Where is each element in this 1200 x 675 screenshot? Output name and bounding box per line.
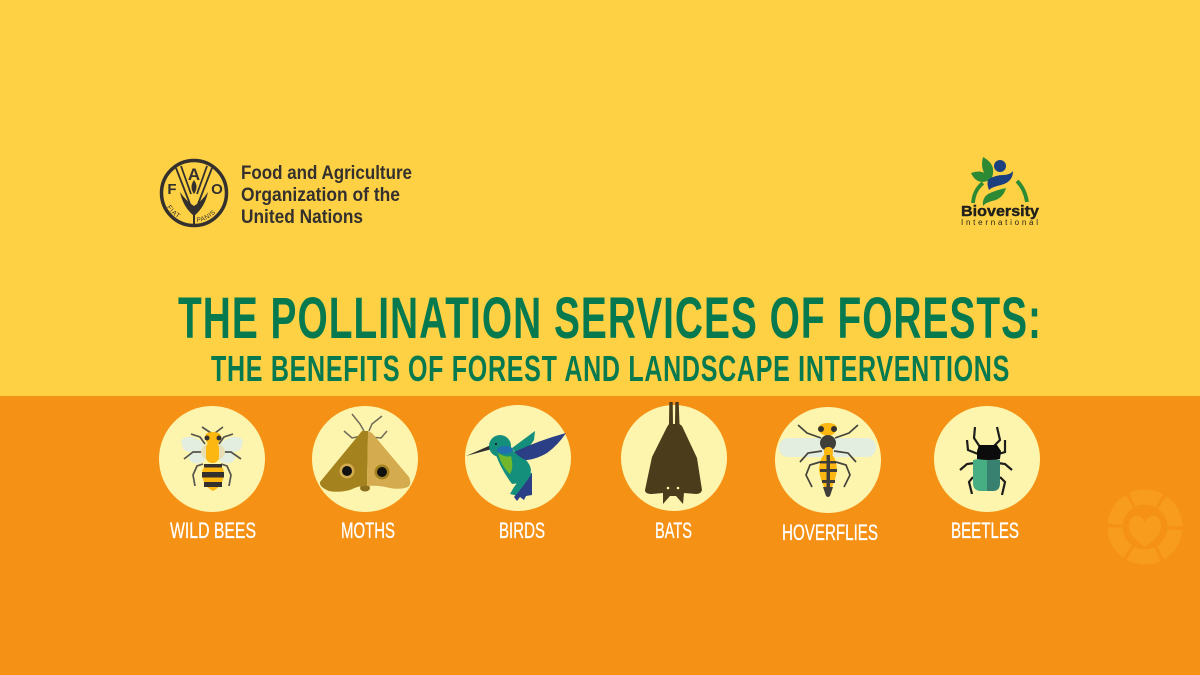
text: FAO name: Organization of the xyxy=(241,185,400,206)
item: bats xyxy=(621,402,727,543)
item: birds xyxy=(465,405,571,543)
icon: beetle xyxy=(934,406,1040,512)
panel: orange lower background xyxy=(0,396,1200,675)
icon: watermark heart cycle xyxy=(1105,487,1185,567)
icon: moth xyxy=(312,406,418,512)
text: Bioversity name: International xyxy=(961,218,1038,227)
logo: FAO xyxy=(160,158,412,228)
label: moths: MOTHS xyxy=(341,518,395,543)
icon: FAO emblem: FIAT xyxy=(167,204,180,218)
text: Bioversity name: Bioversity xyxy=(961,204,1039,220)
label: birds: BIRDS xyxy=(499,518,545,543)
icon: Bioversity emblem xyxy=(971,157,1027,206)
text: FAO name xyxy=(241,163,412,228)
icon: FAO emblem xyxy=(160,158,228,228)
item: beetles xyxy=(934,406,1040,543)
text: Bioversity name xyxy=(961,204,1039,227)
item: hoverflies xyxy=(775,407,881,545)
label: beetles: BEETLES xyxy=(951,518,1019,543)
text: FAO name: Food and Agriculture xyxy=(241,163,412,184)
icon: hoverfly xyxy=(775,407,881,513)
icon: FAO emblem: O xyxy=(211,181,223,198)
icon: hanging bat xyxy=(621,402,727,511)
icon: FAO emblem: F xyxy=(167,181,177,198)
panel: yellow upper background xyxy=(0,0,1200,396)
icon: FAO emblem: A xyxy=(188,165,200,184)
logo: Bioversity International xyxy=(961,157,1039,227)
label: wild bees: WILD BEES xyxy=(170,518,256,543)
icon: hummingbird xyxy=(465,405,571,511)
label: bats: BATS xyxy=(655,518,692,543)
icon: wild bee xyxy=(159,406,265,512)
icon: FAO emblem: PANIS xyxy=(196,210,215,222)
label: hoverflies: HOVERFLIES xyxy=(782,520,878,545)
item: moths xyxy=(312,406,418,543)
text: FAO name: United Nations xyxy=(241,207,363,228)
item: wild bees xyxy=(159,406,265,543)
